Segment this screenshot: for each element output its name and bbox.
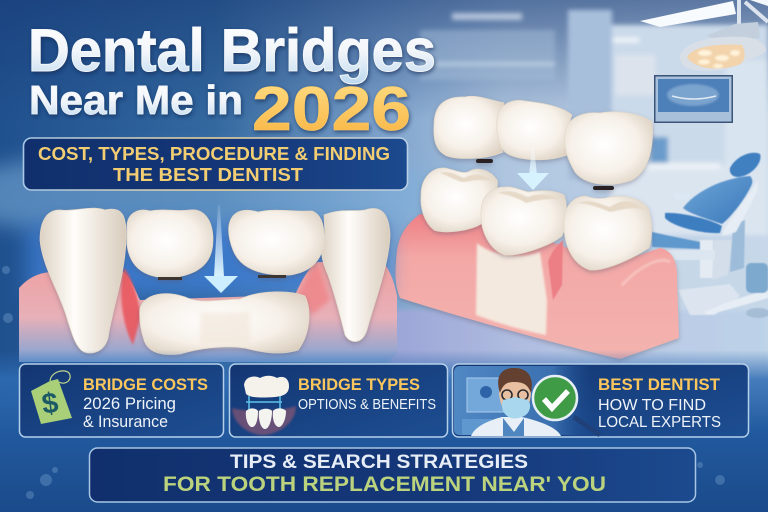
bottom blue fade bbox=[0, 350, 768, 512]
right down arrow bbox=[517, 146, 549, 190]
bridge costs text bbox=[83, 375, 208, 431]
icon: magnifier check bbox=[533, 376, 600, 435]
right crown bbox=[229, 210, 324, 275]
left down arrow bbox=[204, 205, 238, 293]
banner text bbox=[163, 451, 606, 496]
left crown bbox=[127, 210, 213, 278]
title bbox=[28, 17, 436, 144]
bokeh dots bbox=[2, 266, 725, 499]
bridge costs text: 2026 Pricing bbox=[83, 395, 176, 413]
right lower teeth bbox=[421, 168, 652, 270]
panel: bridge types bbox=[230, 364, 448, 437]
banner text: FOR TOOTH REPLACEMENT NEAR' YOU bbox=[163, 472, 606, 496]
title line 2: Near Me in bbox=[29, 77, 243, 123]
dental lamp bbox=[680, 0, 768, 71]
subtitle text bbox=[38, 143, 390, 185]
bridge costs text: BRIDGE COSTS bbox=[83, 375, 208, 394]
left panel backdrop bbox=[28, 225, 388, 295]
subtitle box bbox=[24, 138, 408, 190]
x-ray monitor bbox=[654, 75, 733, 123]
best dentist text bbox=[598, 375, 721, 431]
lower bridge bbox=[140, 292, 309, 354]
best dentist text: BEST DENTIST bbox=[598, 375, 721, 394]
dental chair bbox=[652, 153, 768, 318]
right tall tooth bbox=[321, 208, 390, 342]
best dentist text: HOW TO FIND bbox=[598, 397, 706, 414]
right gum model bbox=[395, 214, 679, 359]
best dentist text: LOCAL EXPERTS bbox=[598, 414, 721, 431]
left gum bbox=[19, 262, 397, 362]
panel: bridge costs bbox=[20, 364, 224, 437]
bridge types text: BRIDGE TYPES bbox=[298, 375, 420, 394]
bridge costs text: & Insurance bbox=[83, 413, 168, 431]
illustration background bbox=[454, 366, 594, 435]
title year: 2026 bbox=[252, 75, 411, 144]
icon: price tag: $ bbox=[40, 387, 60, 421]
title line 1: Dental Bridges bbox=[28, 17, 436, 84]
icon: tooth bridge bbox=[232, 376, 296, 435]
background floor glow bbox=[390, 310, 768, 370]
lower teeth cusps bbox=[440, 172, 645, 212]
subtitle text: COST, TYPES, PROCEDURE & FINDING bbox=[38, 143, 390, 164]
ceiling light bbox=[640, 1, 736, 27]
left molar tooth bbox=[40, 208, 126, 353]
right upper crowns bbox=[434, 96, 652, 190]
icon: price tag bbox=[31, 371, 72, 424]
banner text: TIPS & SEARCH STRATEGIES bbox=[230, 451, 528, 473]
panel: best dentist bbox=[452, 364, 748, 437]
bridge types text: OPTIONS & BENEFITS bbox=[298, 396, 436, 413]
subtitle text: THE BEST DENTIST bbox=[113, 164, 304, 185]
left teeth bbox=[40, 208, 390, 354]
bottom banner bbox=[90, 448, 696, 502]
icon: dentist bbox=[471, 368, 561, 436]
bridge types text bbox=[298, 375, 436, 413]
bone section bbox=[476, 243, 547, 335]
